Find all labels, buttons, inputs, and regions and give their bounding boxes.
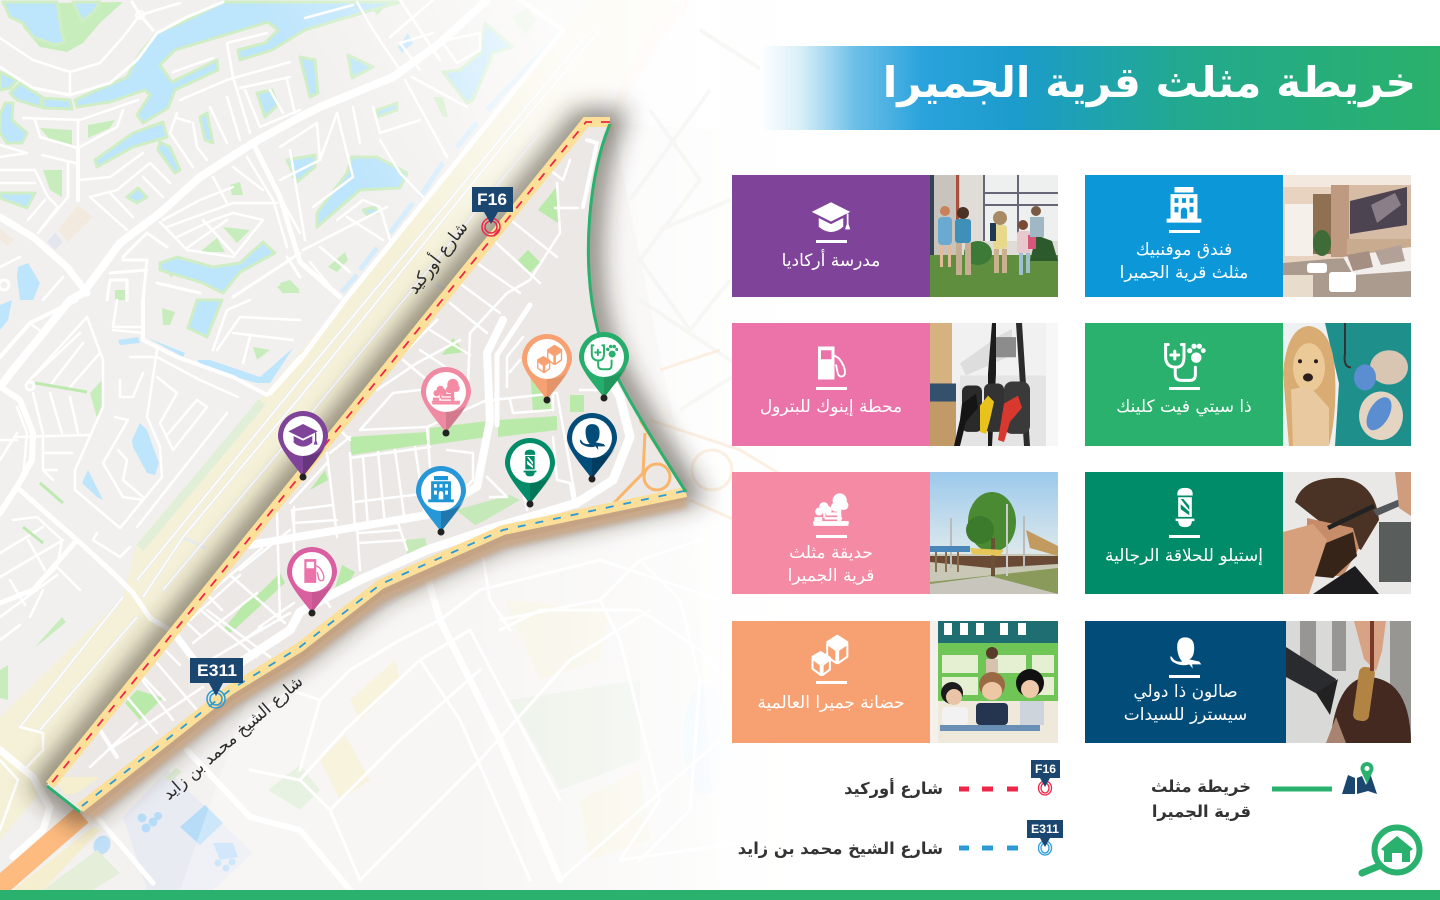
- legend: Sheikh Mohammed bin Zayed street: شارع الشيخ محمد بن زايد: [738, 839, 943, 858]
- legend graphics: E311 sign and dashes: [959, 820, 1063, 856]
- legend graphics: E311 sign and dashes: E311: [1031, 822, 1059, 836]
- card: Movenpick Hotel: مثلث قرية الجميرا: [1120, 263, 1248, 283]
- card: ENOC petrol station: محطة إينوك للبترول: [760, 397, 902, 417]
- photo: vet with dog and cat: [1283, 323, 1411, 446]
- card: Arcadia School: [732, 175, 1058, 297]
- right faint roads: [630, 30, 840, 410]
- card: Jumeirah International Nursery: [732, 621, 1058, 743]
- internal streets: [90, 140, 630, 767]
- legend line and map icon: [1272, 762, 1377, 794]
- photo: children running: [930, 175, 1058, 297]
- legend graphics: Orchid sign and dashes: [959, 760, 1060, 796]
- pin: hotel: [416, 466, 466, 536]
- card: Arcadia School: مدرسة أركاديا: [782, 251, 880, 271]
- orange ramps: [612, 420, 682, 502]
- bottom green bar: [0, 890, 1440, 900]
- card: Estilo men's barber: إستيلو للحلاقة الرجالية: [1105, 546, 1263, 566]
- pin: ladies salon: [567, 413, 617, 482]
- legend: triangle map: [1151, 777, 1251, 821]
- road sign: E311: E311: [197, 661, 237, 680]
- pin: nursery: [522, 334, 572, 404]
- card: Movenpick Hotel: [1085, 175, 1411, 297]
- card: Jumeirah International Nursery: حضانة جميرا العالمية: [757, 693, 905, 713]
- card: The City Vet Clinic: ذا سيتي فيت كلينك: [1116, 397, 1252, 417]
- pale yellow corner wedge: [58, 777, 100, 795]
- tan lots: [0, 205, 93, 250]
- photo: barber cutting hair: [1283, 472, 1411, 594]
- legend: triangle map: قرية الجميرا: [1152, 802, 1251, 821]
- highway orange road: [0, 0, 690, 895]
- green parks inside: [125, 185, 584, 720]
- card: Estilo men's barber: [1085, 472, 1411, 594]
- bottom faded district: [0, 470, 860, 890]
- card: The City Vet Clinic: [1085, 323, 1411, 446]
- legend graphics: Orchid sign and dashes: F16: [1035, 762, 1056, 776]
- pin: petrol station: [287, 547, 337, 616]
- beige highway corridor: [0, 0, 690, 840]
- highway green strip and side water: [140, 33, 560, 548]
- photo: park: [930, 472, 1058, 594]
- card: Jumeirah Village Triangle Park: [732, 472, 1058, 594]
- photo: hotel bedroom: [1283, 175, 1411, 297]
- card: Movenpick Hotel: فندق موفنبيك: [1136, 240, 1232, 260]
- road bands around triangle: [47, 122, 686, 812]
- card: The Dolly Sisters ladies salon: صالون ذا دولي: [1133, 682, 1238, 702]
- legend: Orchid street: شارع أوركيد: [844, 779, 943, 798]
- photo: fuel pumps: [930, 323, 1046, 446]
- pin: barber: [505, 438, 555, 508]
- pin: school: [278, 411, 328, 480]
- road sign: E311: [190, 658, 243, 708]
- water: canals and ponds: [0, 2, 513, 500]
- card: The Dolly Sisters ladies salon: [1085, 621, 1411, 743]
- title banner: [760, 46, 1440, 130]
- title: خريطة مثلث قرية الجميرا: [883, 58, 1416, 107]
- green line strips: [23, 383, 87, 543]
- pin: vet clinic: [579, 332, 629, 402]
- card: The Dolly Sisters ladies salon: سيسترز للسيدات: [1124, 705, 1247, 725]
- card: Jumeirah Village Triangle Park: حديقة مثلث: [789, 543, 873, 563]
- card: Jumeirah Village Triangle Park: قرية الجميرا: [788, 566, 874, 586]
- photo: nursery children: [930, 621, 1058, 743]
- fade overlays: [250, 0, 720, 430]
- interchange lower left: [0, 727, 75, 857]
- road sign: F16: F16: [477, 190, 507, 209]
- main roads left of triangle: [0, 0, 563, 640]
- triangle shadow: [47, 122, 686, 816]
- pin: park: [421, 367, 471, 436]
- card: ENOC petrol station: [732, 323, 1046, 446]
- green spaces: [0, 2, 537, 700]
- map of Jumeirah Village Triangle: [0, 0, 780, 890]
- highway lanes: [20, 30, 600, 730]
- road name: Orchid street: شارع أوركيد: [402, 217, 473, 298]
- road name: Sheikh Mohammed bin Zayed street: شارع الشيخ محمد بن زايد: [159, 672, 307, 804]
- logo: magnifier with house: [1358, 824, 1422, 876]
- legend: triangle map: خريطة مثلث: [1151, 777, 1251, 796]
- photo: hair blow-dry: [1286, 621, 1411, 743]
- road sign: F16: [472, 187, 513, 236]
- triangle interior: [47, 127, 682, 812]
